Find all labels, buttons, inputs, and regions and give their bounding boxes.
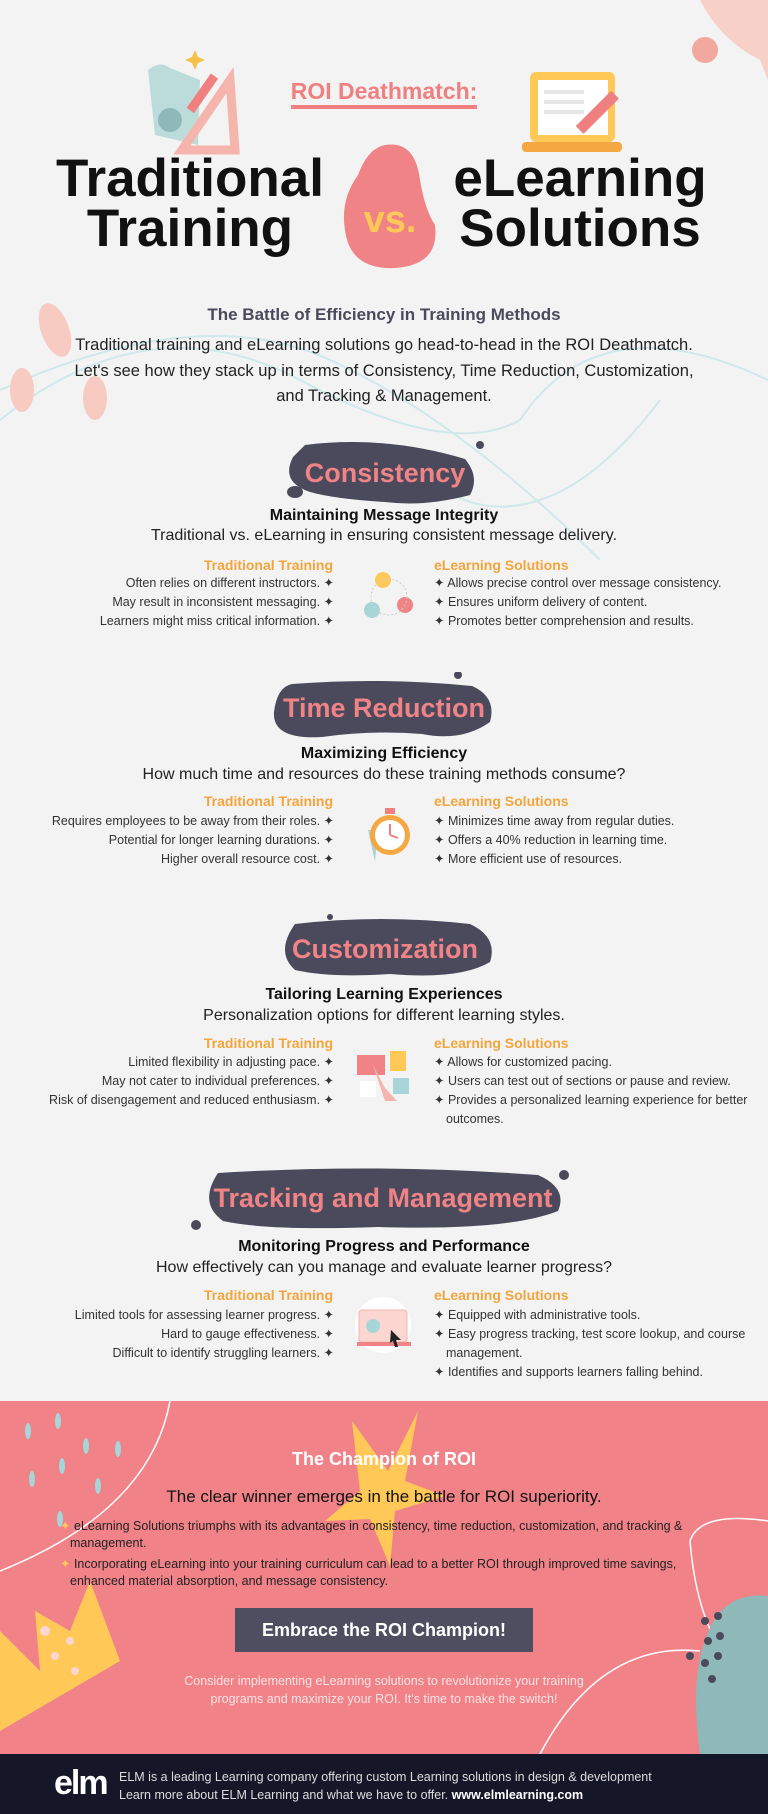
subheading: The clear winner emerges in the battle for ROI superiority. [166,1487,602,1506]
title: Traditional Training: Traditional [56,149,324,208]
icon: sticky notes with hand [357,1051,409,1101]
footer text: ELM is a leading Learning company offering custom Learning solutions in design & development [119,1770,652,1784]
title: Traditional Training [56,149,324,258]
button: Embrace the ROI Champion: Embrace the ROI Champion! [262,1620,506,1640]
intro paragraph [74,336,694,405]
section: Tracking and Management: How effectively can you manage and evaluate learner progress? [156,1259,612,1276]
logo: elm: elm [54,1764,107,1802]
section: Time Reduction: Potential for longer learning durations. ✦ [109,833,334,847]
section: Tracking and Management: ✦ Identifies and supports learners falling behind. [434,1365,703,1379]
section: Tracking and Management [75,1168,745,1379]
badge: Time Reduction [274,672,492,738]
icon: monitor with cursor [355,1297,411,1353]
section: Tracking and Management: Monitoring Progress and Performance [238,1238,530,1255]
section: Time Reduction: Higher overall resource cost. ✦ [161,852,334,866]
section: Customization: ✦ Allows for customized pacing. [434,1055,612,1069]
heading: The Champion of ROI: The Champion of ROI [292,1449,476,1469]
badge: Customization [285,914,492,976]
section: Time Reduction: Maximizing Efficiency [301,745,467,762]
button: Embrace the ROI Champion [235,1608,533,1652]
section: Consistency: Traditional vs. eLearning in ensuring consistent message delivery. [151,527,617,544]
section: Tracking and Management: eLearning Solutions [434,1287,569,1303]
section: Consistency [100,441,721,628]
badge: Time Reduction: Time Reduction [283,693,485,723]
heading: ROI Deathmatch: ROI Deathmatch: [291,78,477,104]
section: Customization: Risk of disengagement and reduced enthusiasm. ✦ [49,1093,334,1107]
bullet list: ✦ eLearning Solutions triumphs with its advantages in consistency, time reduction, customization, and tracking & management. [60,1519,682,1550]
section: Customization: ✦ Provides a personalized learning experience for better outcomes. [434,1093,747,1126]
intro paragraph: Let's see how they stack up in terms of Consistency, Time Reduction, Customization, [74,362,694,380]
section: Time Reduction: Traditional Training [204,793,333,809]
bullet list: ✦ Incorporating eLearning into your training curriculum can lead to a better ROI through improved time savings, enhanced material absorption, and message consistency. [60,1557,676,1588]
badge: Tracking and Management [191,1168,569,1230]
section: Tracking and Management: ✦ Easy progress tracking, test score lookup, and course management. [434,1327,745,1360]
panel: Champion of ROI [0,1401,768,1754]
section: Customization: ✦ Users can test out of sections or pause and review. [434,1074,731,1088]
subtitle: The Battle of Efficiency in Training Methods [207,305,561,324]
footer text [119,1770,652,1802]
icon: drafting tools [148,50,240,154]
section: Customization: eLearning Solutions [434,1035,569,1051]
intro paragraph: and Tracking & Management. [276,387,492,405]
background decorations [0,0,768,561]
closing text: Consider implementing eLearning solutions to revolutionize your training [184,1674,584,1688]
title: Traditional Training: Training [87,199,293,258]
badge: Consistency [287,441,484,504]
section: Customization: May not cater to individual preferences. ✦ [102,1074,334,1088]
section: Time Reduction: Requires employees to be away from their roles. ✦ [52,814,334,828]
section: Consistency: Maintaining Message Integrity [270,507,498,524]
section: Customization: Limited flexibility in adjusting pace. ✦ [128,1055,334,1069]
title: eLearning Solutions: Solutions [459,199,701,258]
section: Customization: Personalization options for different learning styles. [203,1007,565,1024]
icon: vs blob [344,144,436,268]
intro paragraph: Traditional training and eLearning solutions go head-to-head in the ROI Deathmatch. [75,336,693,354]
icon: connected circles [364,572,413,618]
icon: stopwatch [368,808,410,862]
closing text: programs and maximize your ROI. It's time to make the switch! [211,1692,557,1706]
bullet list [60,1519,682,1588]
section: Consistency: eLearning Solutions [434,557,569,573]
badge: Tracking and Management: Tracking and Management [213,1183,553,1213]
title: eLearning Solutions [453,149,707,258]
section: Tracking and Management: ✦ Equipped with administrative tools. [434,1308,640,1322]
section: Consistency: Learners might miss critical information. ✦ [100,614,334,628]
section: Time Reduction [52,672,674,866]
section: Consistency: May result in inconsistent messaging. ✦ [112,595,334,609]
icon: vs blob: vs. [364,199,416,241]
section: Tracking and Management: Traditional Training [204,1287,333,1303]
section: Tracking and Management: Limited tools for assessing learner progress. ✦ [75,1308,334,1322]
section: Customization: Traditional Training [204,1035,333,1051]
section: Time Reduction: ✦ More efficient use of resources. [434,852,622,866]
footer text: Learn more about ELM Learning and what we have to offer. www.elmlearning.com [119,1788,583,1802]
section: Consistency: Traditional Training [204,557,333,573]
section: Tracking and Management: Difficult to identify struggling learners. ✦ [113,1346,334,1360]
badge: Customization: Customization [292,934,478,964]
section: Customization: Tailoring Learning Experiences [265,986,503,1003]
title: eLearning Solutions: eLearning [453,149,707,208]
section: Consistency: ✦ Promotes better comprehension and results. [434,614,694,628]
section: Time Reduction: eLearning Solutions [434,793,569,809]
section: Time Reduction: ✦ Offers a 40% reduction in learning time. [434,833,667,847]
icon: laptop [522,72,622,152]
badge: Consistency: Consistency [305,458,465,488]
section: Consistency: ✦ Allows precise control over message consistency. [434,576,721,590]
closing text [184,1674,584,1706]
section: Customization [49,914,748,1126]
section: Consistency: ✦ Ensures uniform delivery of content. [434,595,647,609]
footer [0,1754,768,1814]
section: Tracking and Management: Hard to gauge effectiveness. ✦ [161,1327,334,1341]
section: Time Reduction: ✦ Minimizes time away from regular duties. [434,814,674,828]
section: Time Reduction: How much time and resources do these training methods consume? [143,766,625,783]
section: Consistency: Often relies on different instructors. ✦ [126,576,334,590]
